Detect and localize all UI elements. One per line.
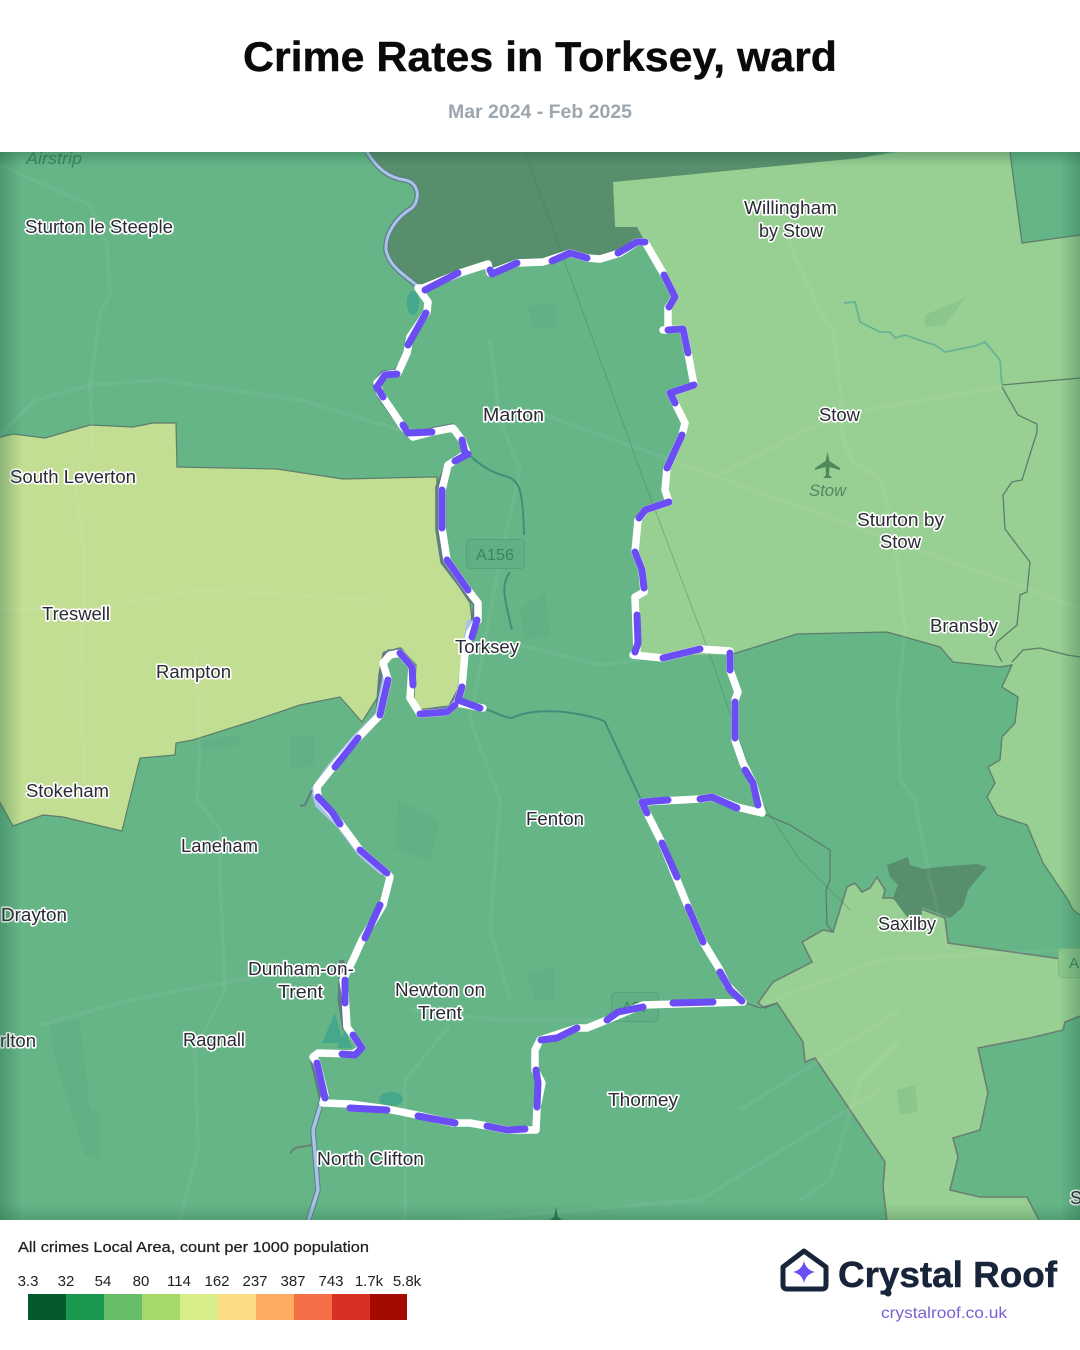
legend scale labels: 54 <box>95 1273 111 1290</box>
legend scale labels: 114 <box>167 1273 191 1290</box>
icon: Stow airfield plane <box>815 452 840 478</box>
place labels: Willingham <box>744 198 837 218</box>
icon: house outline <box>783 1251 826 1289</box>
region: Saxilby light green area <box>758 877 1080 1222</box>
road shield: right edge: A <box>1069 955 1079 972</box>
place labels: Drayton <box>1 905 67 925</box>
place labels: Thorney <box>608 1090 678 1110</box>
legend colour bar <box>28 1294 407 1320</box>
logo: Crystal Roof <box>783 1251 1058 1296</box>
airfield label: Airstrip: Airstrip <box>25 149 82 168</box>
stream: Stow beck <box>844 302 1002 385</box>
place labels: Stow <box>819 405 861 425</box>
wordmark key dot <box>884 1290 892 1296</box>
map panel <box>0 149 1080 1222</box>
road shield: A156 <box>466 540 524 568</box>
legend scale labels: 80 <box>133 1273 149 1290</box>
icon: plane at bottom edge <box>550 1208 562 1220</box>
subtitle: date range: Mar 2024 - Feb 2025 <box>448 102 632 123</box>
legend scale labels <box>18 1273 422 1290</box>
road shield: right edge <box>1058 948 1080 978</box>
wordmark: Crystal Roof <box>838 1254 1058 1295</box>
icon: crystal star <box>793 1261 815 1283</box>
River Trent <box>290 152 476 1222</box>
place labels: Ragnall <box>183 1030 245 1050</box>
place labels: Saxilby <box>878 914 936 934</box>
place labels: Stokeham <box>26 781 109 801</box>
airfield label: Stow: Stow <box>809 481 848 500</box>
stream: Fossdyke and tributary <box>467 453 642 802</box>
fields and woodland patches <box>897 298 964 1115</box>
place labels: Trent <box>418 1003 462 1023</box>
legend scale labels: 387 <box>280 1273 306 1290</box>
road shield: A57 <box>612 992 658 1022</box>
place labels: Trent <box>278 982 323 1002</box>
railway line <box>525 152 850 910</box>
place labels: by Stow <box>759 221 824 241</box>
roads <box>81 205 940 1112</box>
legend scale labels: 162 <box>204 1273 230 1290</box>
place labels: Newton on <box>395 980 485 1000</box>
region: northern dark green area <box>367 150 900 288</box>
legend scale labels: 237 <box>242 1273 268 1290</box>
ward outline: white base <box>313 242 762 1130</box>
place labels: rlton <box>0 1031 36 1051</box>
place labels: Sturton by <box>857 510 944 530</box>
road shield: A156: A156 <box>476 547 514 564</box>
place labels: Stow <box>880 532 922 552</box>
place labels: Treswell <box>42 604 110 624</box>
lakes <box>322 291 419 1106</box>
place labels: Bransby <box>930 616 998 636</box>
place labels: Laneham <box>181 836 258 856</box>
region: west yellow-green area <box>0 423 472 831</box>
place labels: Marton <box>483 405 544 425</box>
place labels: South Leverton <box>10 467 136 487</box>
place labels: Rampton <box>156 662 231 682</box>
legend scale labels: 3.3 <box>18 1273 38 1290</box>
website link text: crystalroof.co.uk <box>881 1305 1008 1322</box>
place labels: Torksey <box>455 637 519 657</box>
road shield: A57: A57 <box>622 999 649 1016</box>
ward outline: purple dashes <box>317 242 758 1130</box>
legend title: All crimes Local Area, count per 1000 population <box>18 1239 369 1256</box>
title: Crime Rates in Torksey, ward <box>243 33 837 80</box>
region: Saxilby high crime dark patch <box>887 857 987 918</box>
legend scale labels: 32 <box>58 1273 74 1290</box>
place labels: North Clifton <box>317 1149 424 1169</box>
place labels: Dunham-on- <box>248 959 354 979</box>
legend scale labels: 5.8k <box>393 1273 422 1290</box>
place labels <box>0 198 1080 1208</box>
legend scale labels: 743 <box>318 1273 344 1290</box>
place labels: Fenton <box>526 809 584 829</box>
place labels: Sturton le Steeple <box>25 217 173 237</box>
region boundaries <box>733 152 1080 1008</box>
map edge vignette <box>0 152 1080 1220</box>
region: north-east light green area <box>613 152 1080 915</box>
legend <box>18 1239 422 1320</box>
legend scale labels: 1.7k <box>355 1273 384 1290</box>
